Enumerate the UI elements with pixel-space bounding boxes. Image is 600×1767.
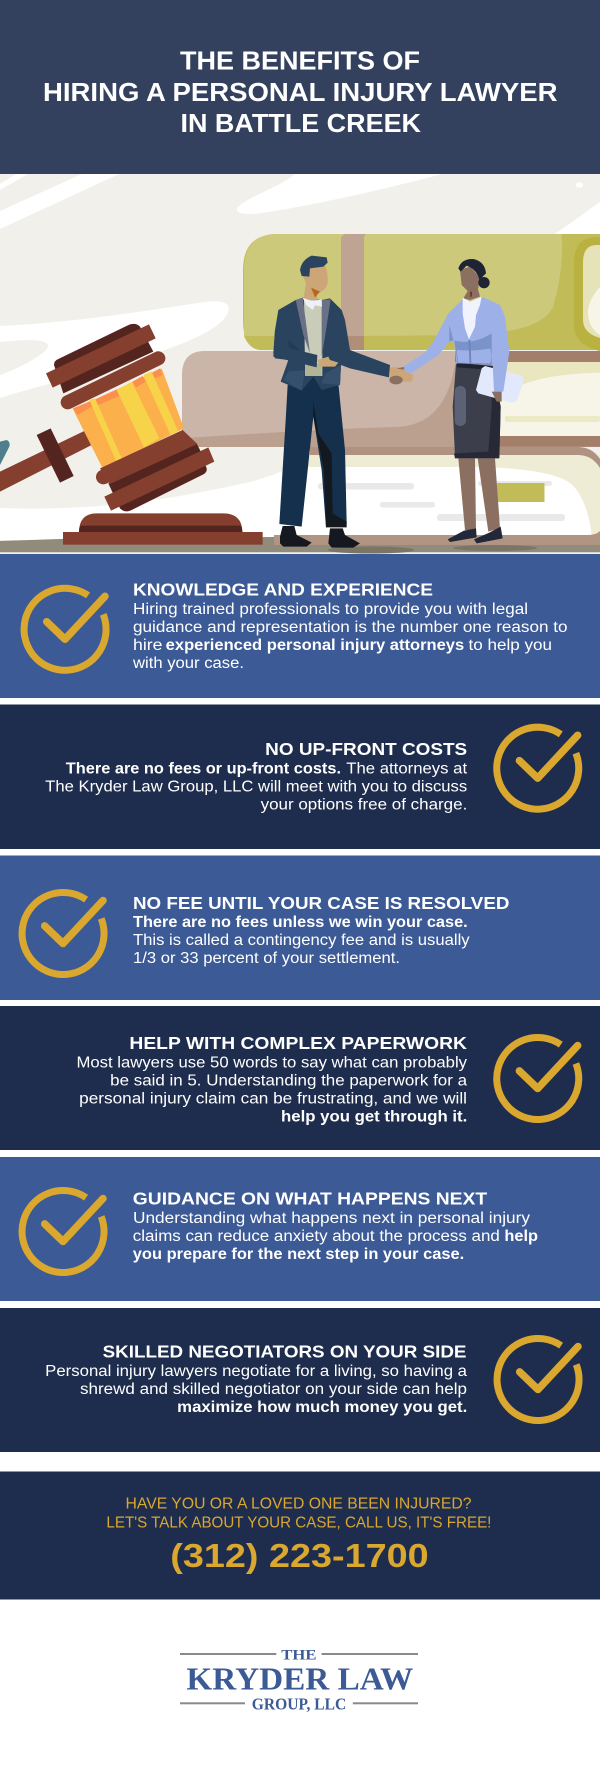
body text [133,1210,538,1263]
heading: GUIDANCE ON WHAT HAPPENS NEXT [133,1189,488,1209]
icon: gold check mark in circle [497,727,579,809]
body text [76,1054,467,1125]
body text: maximize how much money you get. [177,1399,467,1416]
body text: Personal injury lawyers negotiate for a living, so having a [45,1363,467,1380]
call to action text [106,1495,491,1531]
body text: to help you [468,637,552,654]
body text [132,601,568,672]
panel: guidance on what happens next [0,1157,600,1301]
body text: The attorneys at [346,760,468,777]
call to action panel [0,1472,600,1600]
body text: with your case. [132,655,244,672]
illustration: lawyer and client shaking hands with gavel and books [0,174,600,554]
body text [45,1363,467,1416]
body text: shrewd and skilled negotiator on your side can help [80,1381,467,1398]
logo: The Kryder Law Group, LLC [180,1647,418,1713]
body text [133,914,470,967]
call to action text: HAVE YOU OR A LOVED ONE BEEN INJURED? [126,1495,472,1512]
icon: gold check mark in circle [22,1191,104,1273]
icon: gold check mark in circle [22,893,104,975]
body text: guidance and representation is the number one reason to [133,619,568,636]
body text [45,760,468,813]
figure: woman with clipboard [403,259,523,543]
body text: experienced personal injury attorneys [166,637,464,654]
title banner [0,0,600,174]
body text: you prepare for the next step in your case. [133,1246,464,1263]
body text: Most lawyers use 50 words to say what can probably [76,1054,467,1071]
heading: HELP WITH COMPLEX PAPERWORK [129,1033,467,1053]
body text: The Kryder Law Group, LLC will meet with you to discuss [45,778,467,795]
heading: NO FEE UNTIL YOUR CASE IS RESOLVED [133,893,509,913]
body text: This is called a contingency fee and is usually [133,932,470,949]
icon: gold check mark in circle [497,1038,579,1120]
panel: help with complex paperwork [0,1006,600,1150]
phone number: (312) 223-1700 [170,1537,429,1574]
icon: gold check mark in circle [497,1339,579,1421]
icon: handshake [389,357,420,384]
body text: Understanding what happens next in personal injury [133,1210,530,1227]
panel: no fee until your case is resolved [0,856,600,1000]
body text: Hiring trained professionals to provide you with legal [133,601,528,618]
title banner: IN BATTLE CREEK [180,110,422,138]
heading: KNOWLEDGE AND EXPERIENCE [133,580,433,600]
bottom book [274,447,600,545]
call to action text: LET'S TALK ABOUT YOUR CASE, CALL US, IT'S FREE! [106,1514,491,1531]
background white swooshes [0,174,600,540]
heading: SKILLED NEGOTIATORS ON YOUR SIDE [103,1342,467,1362]
title banner: THE BENEFITS OF [180,48,420,76]
icon: gavel [0,324,263,545]
logo: The Kryder Law Group, LLC: THE [281,1647,316,1663]
body text: be said in 5. Understanding the paperwork for a [110,1072,467,1089]
body text: help you get through it. [281,1108,467,1125]
panel: skilled negotiators on your side [0,1308,600,1452]
body text: 1/3 or 33 percent of your settlement. [133,950,400,967]
heading: NO UP-FRONT COSTS [265,739,467,759]
icon: gold check mark in circle [24,588,106,670]
body text: There are no fees or up-front costs. [66,760,341,777]
top book [243,234,600,351]
body text: There are no fees unless we win your case. [133,914,468,931]
panel: knowledge and experience [0,554,600,698]
logo: The Kryder Law Group, LLC: KRYDER LAW [186,1660,413,1696]
ground [0,537,600,553]
figure: man in suit [273,256,390,548]
title banner: HIRING A PERSONAL INJURY LAWYER [43,79,558,107]
body text: claims can reduce anxiety about the process and [133,1228,500,1245]
body text: hire [133,637,162,654]
body text: personal injury claim can be frustrating, and we will [79,1090,467,1107]
logo: The Kryder Law Group, LLC: GROUP, LLC [252,1694,346,1713]
body text: your options free of charge. [261,796,467,813]
body text: help [504,1228,538,1245]
middle book [182,351,600,447]
panel: no up-front costs [0,704,600,849]
